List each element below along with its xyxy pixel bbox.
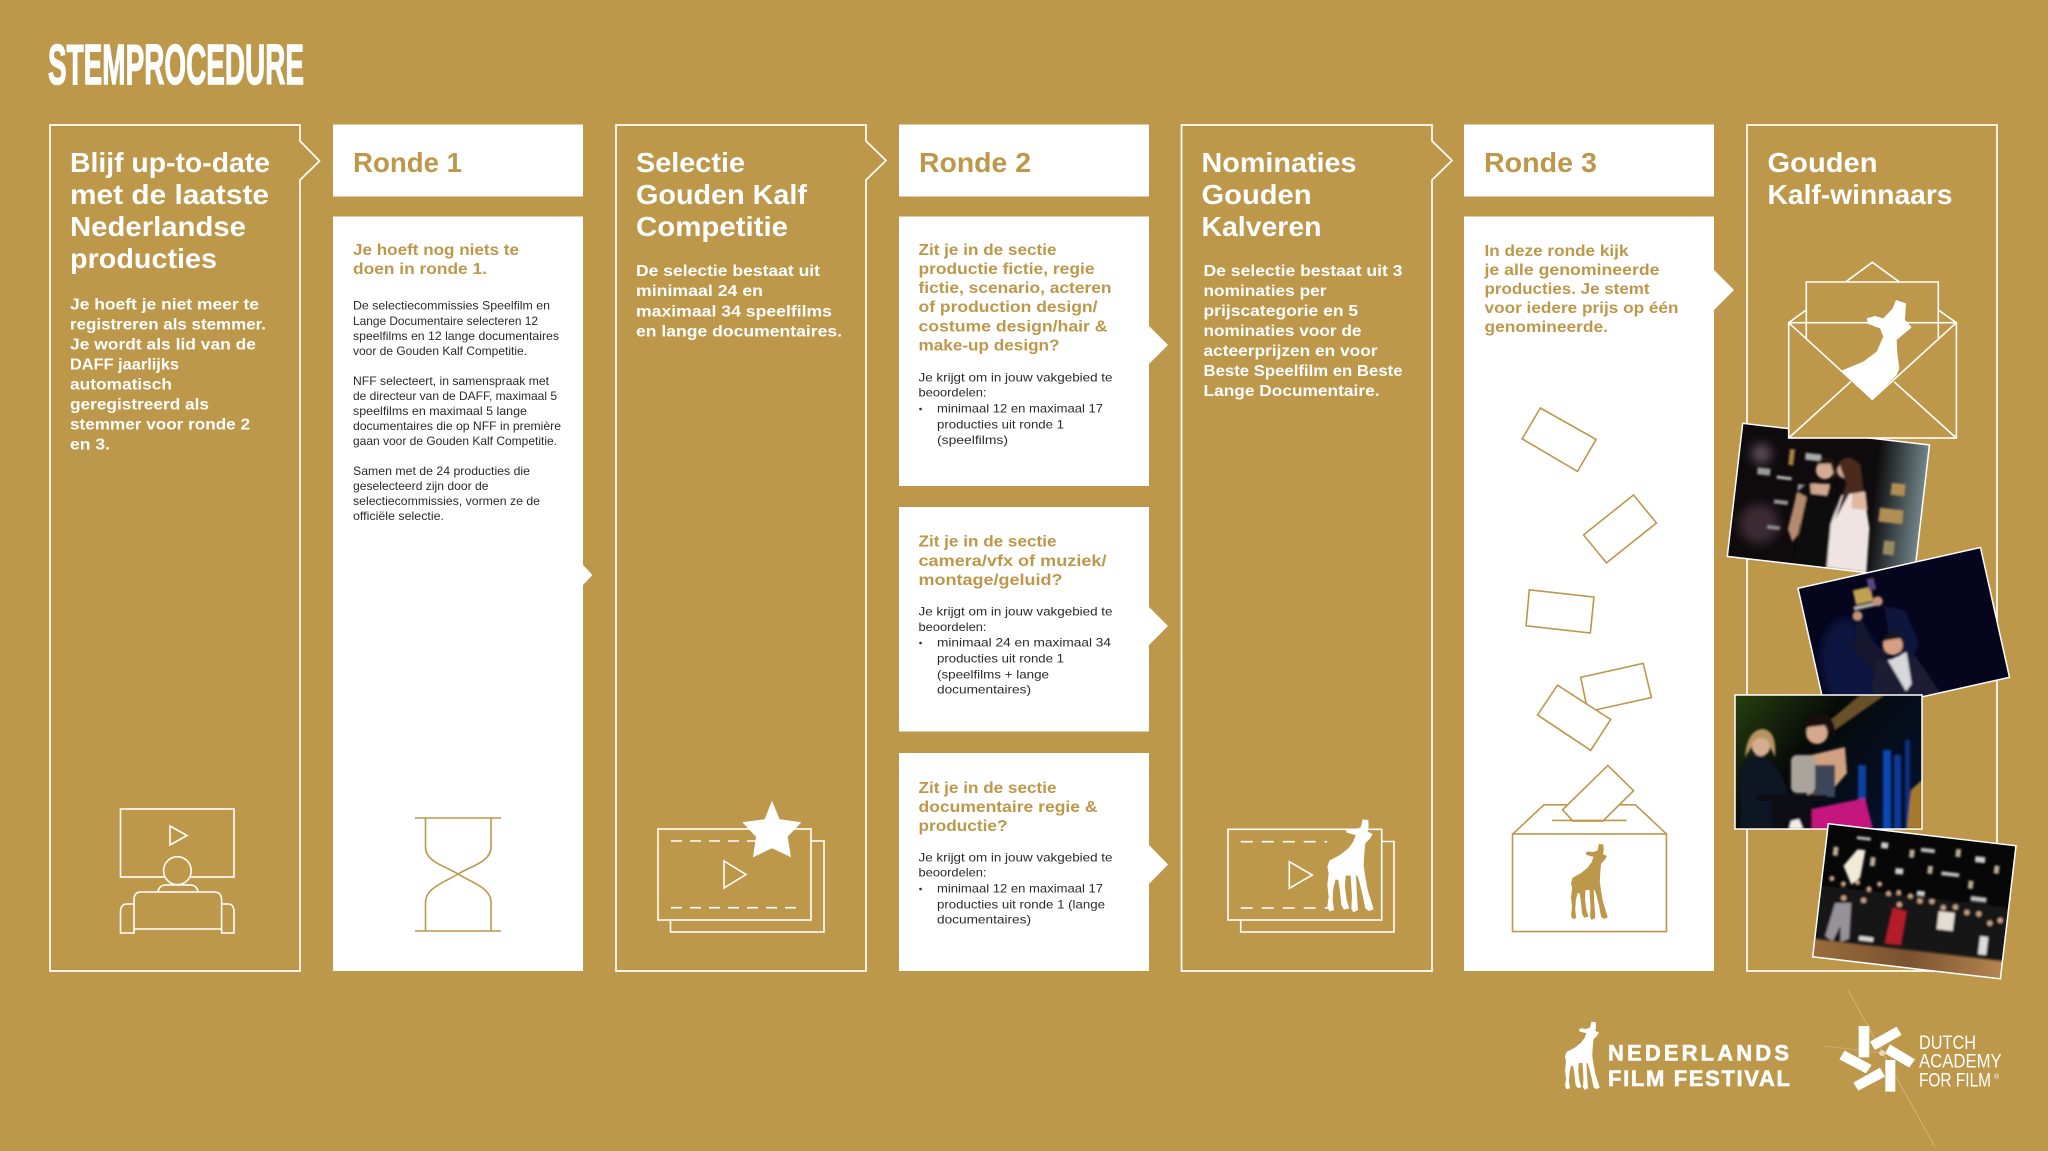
card: camera vfx muziek montage geluid: camera/vfx of muziek/ xyxy=(918,553,1107,570)
card: camera vfx muziek montage geluid: producties uit ronde 1 xyxy=(937,652,1064,666)
card: documentaire regie en productie: minimaal 12 en maximaal 17 xyxy=(937,882,1103,896)
heading: nominaties: Gouden xyxy=(1202,179,1312,210)
text: registratie: automatisch xyxy=(70,376,172,394)
icon: viewer on sofa watching screen xyxy=(120,809,234,933)
heading: ronde 2 xyxy=(899,124,1149,196)
subheading: ronde 1: doen in ronde 1. xyxy=(353,261,487,278)
text: ronde 1: documentaires die op NFF in première xyxy=(353,419,561,433)
text: selectie xyxy=(636,263,842,340)
icon: falling ballots xyxy=(1522,408,1656,750)
text: registratie: en 3. xyxy=(70,436,110,454)
text: nominaties: acteerprijzen en voor xyxy=(1204,343,1378,360)
text: nominaties xyxy=(1204,263,1403,400)
heading: nominaties xyxy=(1202,147,1356,242)
panel: nominaties gouden kalveren xyxy=(1182,125,1452,971)
card: documentaire regie en productie: Je krijgt om in jouw vakgebied te xyxy=(918,850,1113,864)
text: ronde 3: In deze ronde kijk xyxy=(1484,243,1629,260)
heading: gouden kalf-winnaars: Kalf-winnaars xyxy=(1768,179,1952,210)
text: registratie: Je hoeft je niet meer te xyxy=(70,296,259,314)
photo: group of winners xyxy=(1813,824,2016,979)
card: productie fictie xyxy=(899,216,1168,486)
heading: ronde 1 xyxy=(333,124,583,196)
icon: ballot box with calf xyxy=(1512,765,1666,932)
text: ronde 1: speelfilms en 12 lange documentaires xyxy=(353,329,559,343)
photo: red carpet duo xyxy=(1727,423,1929,578)
card: camera vfx muziek montage geluid: minimaal 24 en maximaal 34 xyxy=(937,636,1111,650)
logo: dutch academy for film: DUTCH xyxy=(1919,1032,1976,1054)
card: camera vfx muziek montage geluid: montage/geluid? xyxy=(918,572,1062,589)
icon: film frame with calf xyxy=(1228,819,1394,932)
heading: ronde 1: Ronde 1 xyxy=(353,147,462,178)
text: ronde 1: Lange Documentaire selecteren 12 xyxy=(353,314,538,328)
text: ronde 3: producties. Je stemt xyxy=(1484,281,1650,298)
text: registratie xyxy=(70,296,266,454)
text: ronde 1: De selectiecommissies Speelfilm en xyxy=(353,298,550,312)
heading: ronde 2: Ronde 2 xyxy=(919,147,1031,178)
card: productie fictie: minimaal 12 en maximaal 17 xyxy=(937,402,1103,416)
subheading: ronde 1 xyxy=(353,242,519,278)
card: productie fictie: make-up design? xyxy=(918,338,1060,354)
logo: dutch academy for film: ACADEMY xyxy=(1919,1051,2002,1073)
card: documentaire regie en productie: Zit je in de sectie xyxy=(918,780,1057,797)
panel: ronde 1 xyxy=(333,124,592,971)
text: ronde 1: voor de Gouden Kalf Competitie. xyxy=(353,344,527,358)
text: selectie: en lange documentaires. xyxy=(636,324,842,340)
heading: gouden kalf-winnaars: Gouden xyxy=(1768,147,1878,178)
text: ronde 1: Samen met de 24 producties die xyxy=(353,464,530,478)
text: ronde 1: officiële selectie. xyxy=(353,509,444,523)
card: productie fictie: of production design/ xyxy=(918,299,1098,316)
text: ronde 1: speelfilms en maximaal 5 lange xyxy=(353,404,527,418)
heading: blijf up-to-date: producties xyxy=(70,243,217,274)
heading: selectie: Gouden Kalf xyxy=(636,179,808,210)
text: selectie: minimaal 24 en xyxy=(636,283,763,300)
panel: ronde 3 xyxy=(1464,124,1734,971)
logo: nederlands film festival xyxy=(1565,1022,1790,1091)
card: camera vfx muziek montage geluid: Je krijgt om in jouw vakgebied te xyxy=(918,604,1113,618)
heading: gouden kalf-winnaars xyxy=(1768,147,1952,210)
text: registratie: registreren als stemmer. xyxy=(70,316,266,334)
heading: nominaties: Nominaties xyxy=(1202,147,1356,178)
text: ronde 1 xyxy=(353,298,561,523)
text: nominaties: nominaties voor de xyxy=(1204,323,1362,340)
card: camera vfx muziek montage geluid: Zit je in de sectie xyxy=(918,534,1057,550)
text: registratie: DAFF jaarlijks xyxy=(70,356,179,374)
text: ronde 1: de directeur van de DAFF, maximaal 5 xyxy=(353,389,557,403)
text: registratie: geregistreerd als xyxy=(70,396,209,414)
heading: selectie: Competitie xyxy=(636,211,788,242)
card: productie fictie: producties uit ronde 1 xyxy=(937,418,1064,432)
icon: hourglass xyxy=(415,818,501,931)
text: ronde 3 xyxy=(1483,243,1678,336)
text: nominaties: De selectie bestaat uit 3 xyxy=(1204,263,1403,280)
heading: ronde 3: Ronde 3 xyxy=(1484,147,1597,178)
heading: selectie xyxy=(636,147,808,242)
card: camera vfx muziek montage geluid: (speelfilms + lange xyxy=(937,668,1049,682)
card: documentaire regie en productie: documentaire regie & xyxy=(918,799,1098,816)
card: productie fictie: fictie, scenario, acteren xyxy=(918,280,1112,297)
photo: acceptance speech xyxy=(1735,695,1922,829)
card: documentaire regie en productie: producties uit ronde 1 (lange xyxy=(937,898,1105,912)
text: nominaties: Lange Documentaire. xyxy=(1204,383,1380,400)
heading: blijf up-to-date xyxy=(70,147,270,274)
card: camera vfx muziek montage geluid xyxy=(899,507,1168,732)
text: selectie: maximaal 34 speelfilms xyxy=(636,304,832,320)
card: documentaire regie en productie xyxy=(899,753,1168,971)
card: documentaire regie en productie: productie? xyxy=(918,818,1008,835)
text: ronde 1: geselecteerd zijn door de xyxy=(353,479,489,493)
text: ronde 3: je alle genomineerde xyxy=(1483,262,1660,279)
card: camera vfx muziek montage geluid: documentaires) xyxy=(937,682,1031,696)
heading: nominaties: Kalveren xyxy=(1202,211,1322,242)
photo: winner with trophy xyxy=(1797,546,2010,698)
heading: selectie: Selectie xyxy=(636,147,745,178)
panel: blijf up-to-date xyxy=(50,125,320,971)
text: nominaties: nominaties per xyxy=(1204,283,1326,300)
text: STEMPROCEDURE xyxy=(48,33,304,97)
card: productie fictie: productie fictie, regie xyxy=(918,261,1095,278)
text: ronde 3: genomineerde. xyxy=(1484,319,1608,336)
text: nominaties: Beste Speelfilm en Beste xyxy=(1204,363,1403,380)
text: selectie: De selectie bestaat uit xyxy=(636,263,821,280)
text: ronde 3: voor iedere prijs op één xyxy=(1484,300,1678,317)
card: productie fictie: costume design/hair & xyxy=(918,318,1108,336)
logo: dutch academy for film: FOR FILM xyxy=(1919,1070,1991,1092)
text: registratie: Je wordt als lid van de xyxy=(70,336,256,354)
logo: dutch academy for film: ® xyxy=(1994,1073,2000,1081)
text: registratie: stemmer voor ronde 2 xyxy=(70,416,250,434)
subheading: ronde 1: Je hoeft nog niets te xyxy=(353,242,519,259)
text: ronde 1: NFF selecteert, in samenspraak met xyxy=(353,374,550,388)
heading: blijf up-to-date: met de laatste xyxy=(70,179,269,210)
card: documentaire regie en productie: documentaires) xyxy=(937,912,1031,926)
panel: ronde 2 xyxy=(899,124,1168,971)
logo: dutch academy for film xyxy=(1825,990,2002,1147)
icon: film frame with star xyxy=(658,801,824,932)
card: camera vfx muziek montage geluid: beoordelen: xyxy=(918,620,986,634)
heading: blijf up-to-date: Nederlandse xyxy=(70,211,246,242)
heading: ronde 3 xyxy=(1464,124,1714,196)
logo: nederlands film festival: NEDERLANDS xyxy=(1608,1041,1789,1066)
text: nominaties: prijscategorie en 5 xyxy=(1204,303,1358,320)
panel: gouden kalf-winnaars xyxy=(1727,125,2016,979)
logo: nederlands film festival: FILM FESTIVAL xyxy=(1608,1066,1790,1091)
card: productie fictie: Je krijgt om in jouw vakgebied te xyxy=(918,370,1113,384)
panel: selectie gouden kalf competitie xyxy=(616,125,886,971)
card: documentaire regie en productie: beoordelen: xyxy=(918,866,986,880)
heading: blijf up-to-date: Blijf up-to-date xyxy=(70,147,270,178)
text: ronde 1: gaan voor de Gouden Kalf Competitie. xyxy=(353,434,557,448)
card: productie fictie: beoordelen: xyxy=(918,386,986,400)
text: ronde 1: selectiecommissies, vormen ze de xyxy=(353,494,540,508)
card: productie fictie: (speelfilms) xyxy=(937,433,1008,447)
card: productie fictie: Zit je in de sectie xyxy=(918,242,1057,259)
icon: envelope with calf letter xyxy=(1789,262,1956,438)
